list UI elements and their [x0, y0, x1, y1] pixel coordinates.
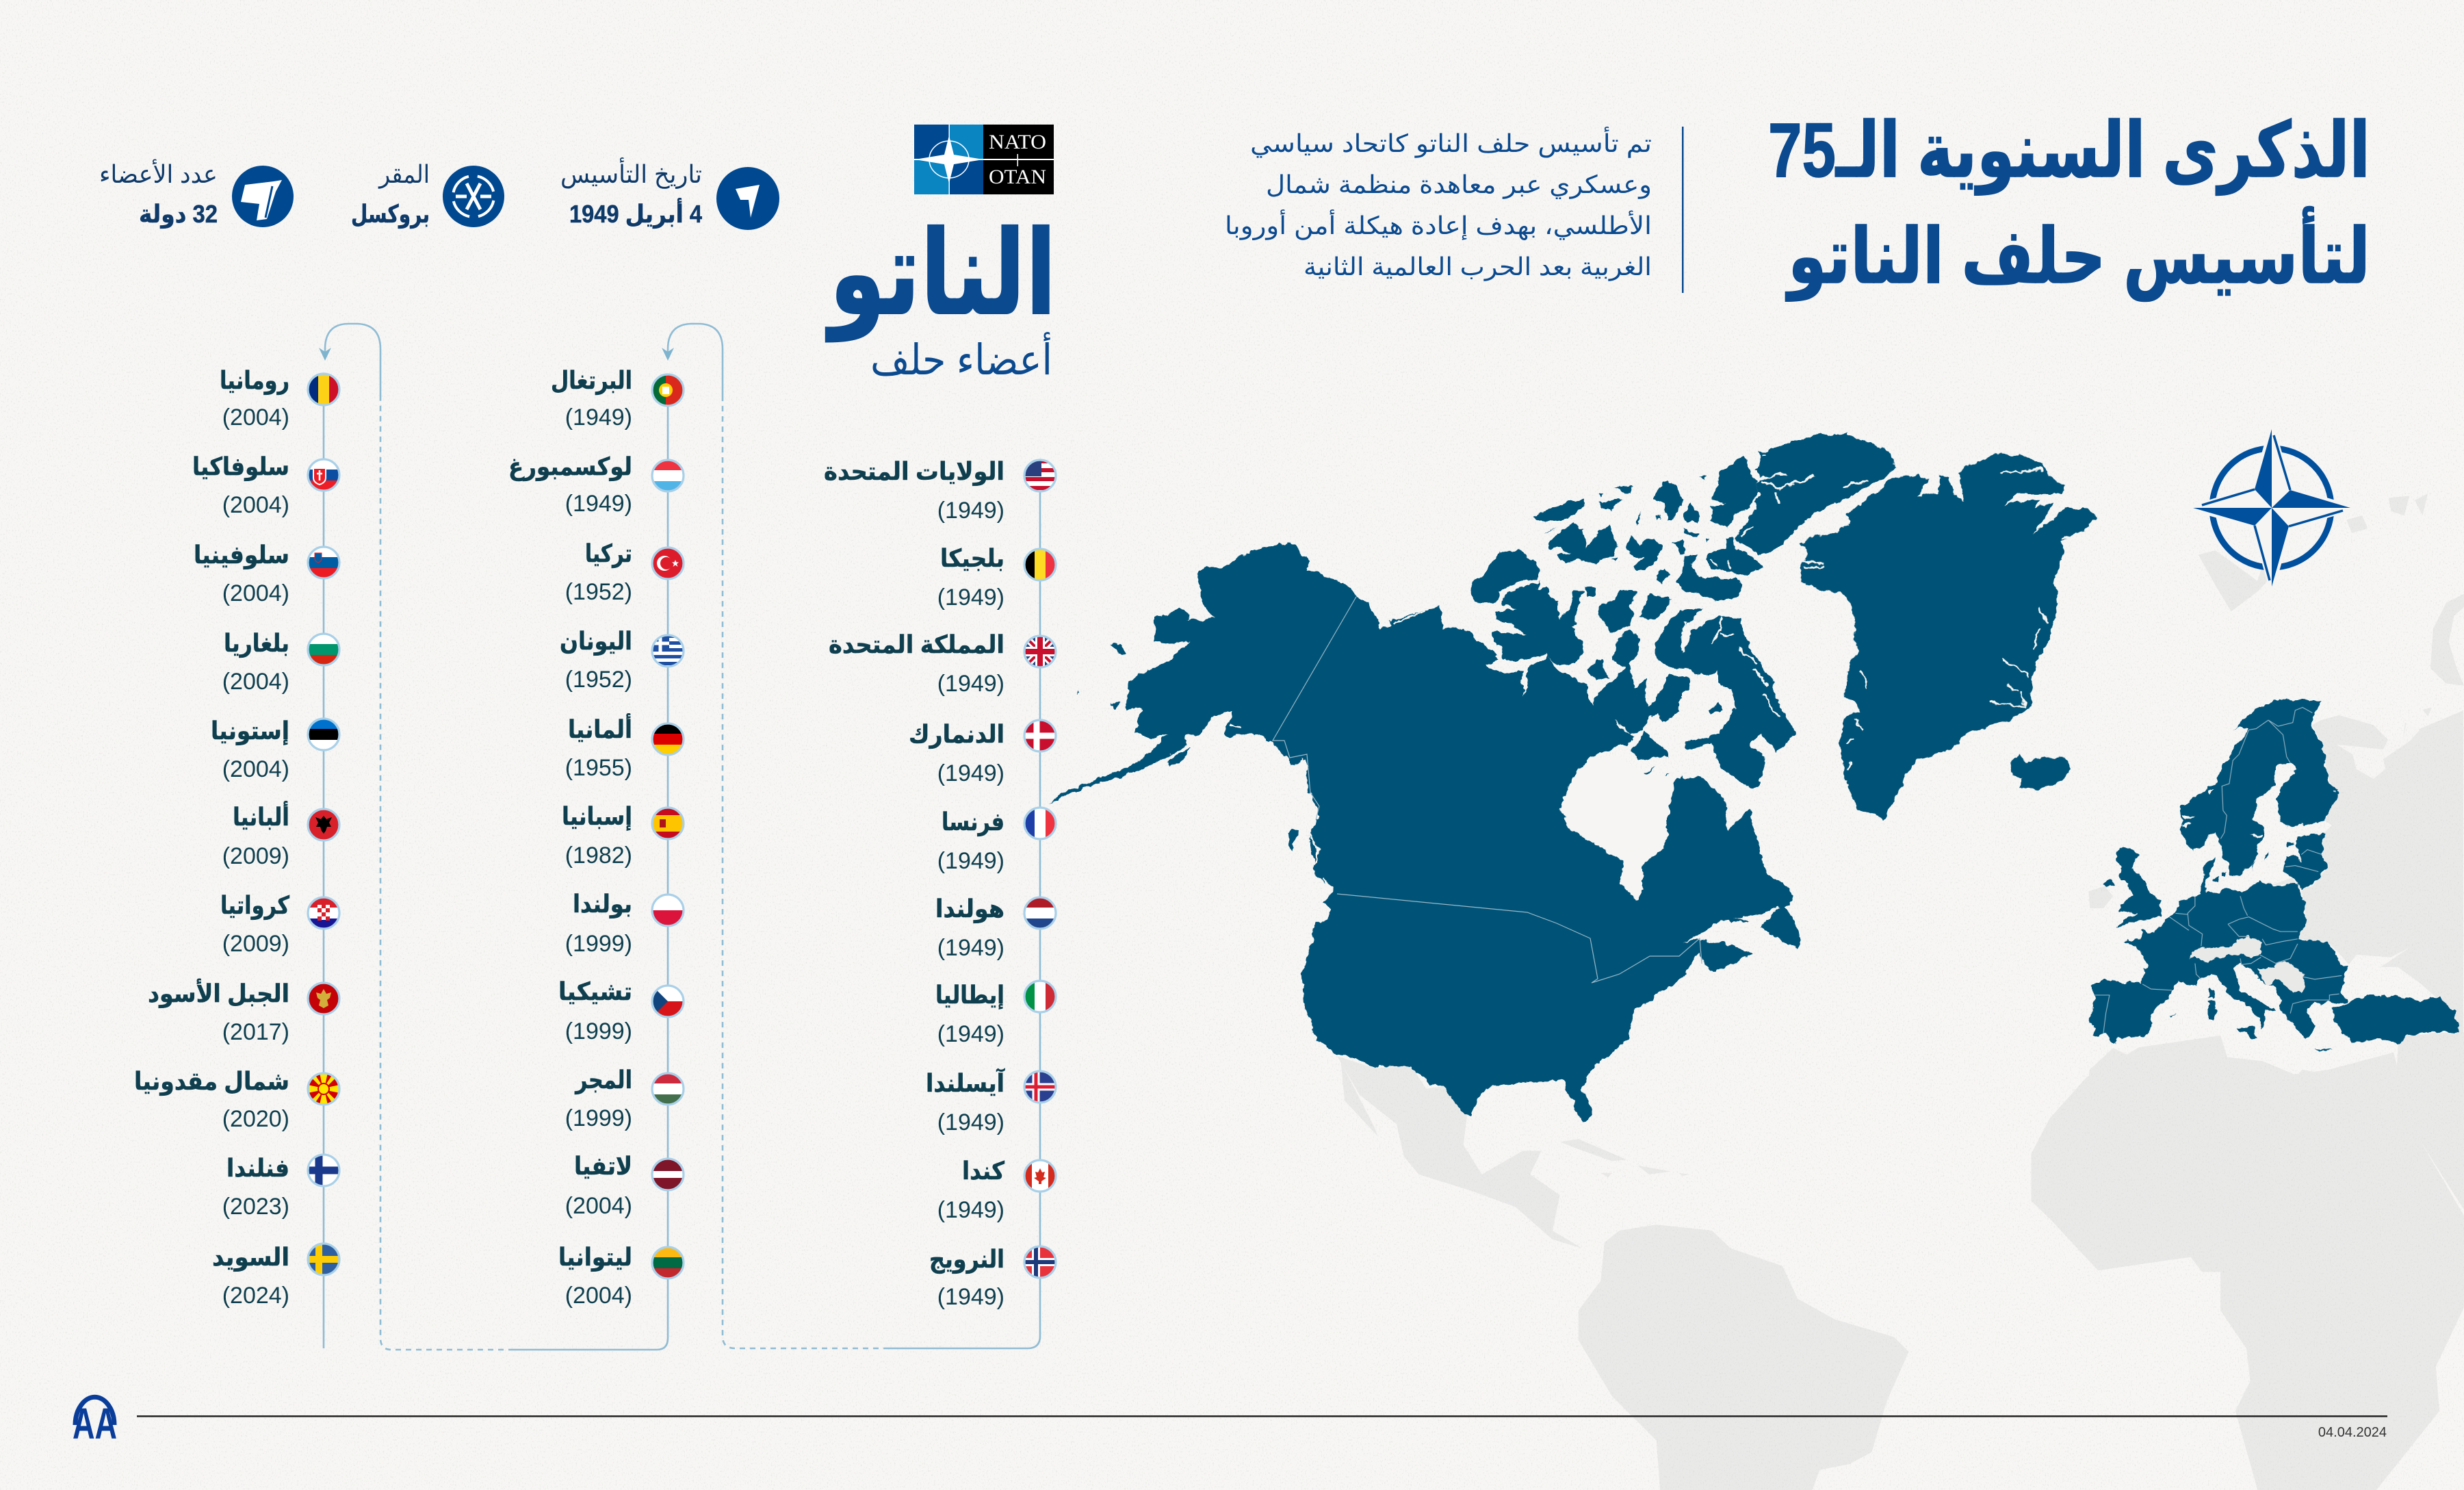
member: Greece: اليونان [560, 627, 632, 656]
member: Turkey: تركيا [585, 539, 632, 568]
member: Luxembourg [508, 452, 684, 517]
white sea on grey map [2337, 723, 2420, 779]
member: Greece [560, 627, 684, 693]
member: United States [824, 457, 1056, 524]
column 2 members [508, 366, 684, 1309]
member: Iceland [926, 1068, 1056, 1135]
member: Denmark [909, 719, 1056, 786]
member: Slovakia: (2004) [222, 492, 289, 518]
member: Norway: (1949) [937, 1284, 1004, 1310]
continental Europe, Italy and Iberia [2088, 856, 2349, 1043]
member: Greece: (1952) [565, 667, 632, 693]
fact: founding date: تاريخ التأسيس [560, 157, 702, 189]
member: United Kingdom: (1949) [937, 671, 1004, 697]
member: Montenegro [148, 978, 340, 1045]
member: Romania: (2004) [222, 404, 289, 431]
member: Bulgaria: بلغاريا [224, 629, 289, 658]
member: Portugal: (1949) [565, 404, 632, 431]
fact: number of members: عدد الأعضاء [99, 159, 218, 188]
member: Albania [222, 801, 340, 869]
member: Norway: النرويج [929, 1245, 1004, 1274]
member: Italy: (1949) [937, 1021, 1004, 1047]
footer rule [137, 1415, 2387, 1417]
member: Estonia: (2004) [222, 756, 289, 782]
member: France: فرنسا [942, 808, 1004, 836]
member: North Macedonia [134, 1067, 340, 1132]
Alaska and western North America [1047, 543, 1587, 1075]
intro text: وعسكري عبر معاهدة منظمة شمال [1266, 170, 1652, 199]
NATO OTAN logo: NATO [989, 131, 1046, 153]
member: Norway [929, 1245, 1056, 1310]
member: Belgium: (1949) [937, 585, 1004, 611]
Anadolu Agency logo: AA [73, 1399, 117, 1448]
fact: founding date: 4 أبريل 1949 [569, 198, 702, 229]
fact: number of members [99, 159, 294, 229]
member: Latvia [565, 1152, 684, 1219]
member: Belgium [937, 544, 1056, 611]
member: United States: الولايات المتحدة [824, 457, 1004, 486]
member: Turkey [565, 539, 684, 605]
member: Slovakia [192, 452, 340, 518]
intro text [1225, 127, 1652, 281]
member: Italy [935, 980, 1056, 1047]
member: North Macedonia: شمال مقدونيا [134, 1067, 289, 1096]
member: Montenegro: (2017) [222, 1019, 289, 1045]
member: Luxembourg: (1949) [565, 491, 632, 517]
member: United Kingdom [829, 630, 1056, 697]
member: Finland: (2023) [222, 1194, 289, 1220]
member: Poland: (1999) [565, 931, 632, 957]
NATO OTAN logo [914, 125, 1054, 194]
member: Canada [937, 1157, 1056, 1223]
member: Bulgaria [222, 629, 340, 695]
member: Slovakia: سلوفاكيا [192, 452, 289, 481]
member: United Kingdom: المملكة المتحدة [829, 630, 1004, 658]
member: Turkey: (1952) [565, 579, 632, 605]
member: Slovenia [194, 541, 340, 606]
intro text: تم تأسيس حلف الناتو كاتحاد سياسي [1250, 127, 1652, 158]
fact: founding date [560, 157, 779, 230]
Hudson Bay water [1561, 758, 1676, 899]
member: Iceland: آيسلندا [926, 1068, 1006, 1097]
member: Slovenia: (2004) [222, 580, 289, 606]
member: Canada: كندا [962, 1157, 1004, 1185]
member: Albania: ألبانيا [233, 801, 289, 831]
member: Lithuania: (2004) [565, 1283, 632, 1309]
member: Czechia [558, 977, 684, 1044]
member: France [937, 807, 1056, 874]
member: Germany: ألمانيا [568, 713, 632, 743]
member: Hungary [565, 1066, 684, 1131]
member: Albania: (2009) [222, 843, 289, 869]
member: Latvia: لاتفيا [574, 1152, 632, 1180]
member: Netherlands [935, 895, 1056, 961]
column 1 members [824, 457, 1056, 1310]
member: Italy: إيطاليا [935, 981, 1004, 1010]
member: Lithuania [558, 1243, 684, 1309]
member: Estonia [211, 717, 340, 782]
member: Hungary: المجر [574, 1066, 632, 1094]
NATO OTAN logo: OTAN [989, 166, 1046, 188]
fact: headquarters [351, 160, 504, 229]
member: Sweden: السويد [212, 1243, 289, 1272]
member: Hungary: (1999) [565, 1105, 632, 1131]
member: Luxembourg: لوكسمبورغ [508, 452, 632, 481]
eastern Canada and United States [1302, 728, 1802, 1122]
member: Czechia: تشيكيا [558, 977, 632, 1005]
member: Estonia: إستونيا [211, 717, 289, 745]
member: Germany [565, 713, 684, 781]
column 3 members [134, 366, 340, 1309]
heading: NATO: الناتو [826, 209, 1056, 342]
Great Britain and Northern Ireland [2116, 847, 2162, 928]
Canadian Arctic archipelago [1471, 433, 1847, 801]
map: North America, Greenland and Europe [1047, 433, 2458, 1122]
member: Netherlands: (1949) [937, 935, 1004, 961]
Mediterranean islands [2169, 988, 2332, 1052]
Scandinavia and Finland [2179, 698, 2338, 875]
Anadolu Agency logo [73, 1397, 117, 1448]
Greenland, Iceland and northern Ellesmere [1797, 433, 2098, 820]
Europe and Turkey NATO members [2088, 698, 2458, 1052]
member: Montenegro: الجبل الأسود [148, 978, 289, 1008]
fact: number of members: 32 دولة [139, 200, 218, 229]
member: Spain: إسبانيا [562, 802, 632, 831]
member: Denmark: الدنمارك [909, 720, 1004, 749]
member: Czechia: (1999) [565, 1018, 632, 1044]
member: Canada: (1949) [937, 1197, 1004, 1223]
background world map: grey landmasses [1337, 493, 2464, 1490]
member: Denmark: (1949) [937, 760, 1004, 786]
member: Finland [222, 1154, 340, 1220]
member: Portugal: البرتغال [551, 366, 632, 395]
member: Lithuania: ليتوانيا [558, 1243, 632, 1272]
member: Croatia [220, 891, 340, 957]
fact: headquarters: المقر [378, 160, 430, 189]
title [1768, 107, 2370, 301]
map: national borders [1273, 597, 2342, 1033]
Baltic states [2283, 834, 2327, 889]
member: Croatia: كرواتيا [220, 891, 289, 920]
member: France: (1949) [937, 848, 1004, 874]
member: Latvia: (2004) [565, 1193, 632, 1219]
member: Finland: فنلندا [226, 1154, 289, 1182]
member: Spain: (1982) [565, 843, 632, 869]
member: United States: (1949) [937, 498, 1004, 524]
member: Romania: رومانيا [220, 366, 289, 395]
subheading: alliance members: أعضاء حلف [870, 332, 1052, 384]
member: Portugal [551, 366, 684, 431]
member: Croatia: (2009) [222, 931, 289, 957]
member: Sweden: (2024) [222, 1283, 289, 1309]
icon: large NATO compass star [2193, 429, 2350, 587]
date: 04.04.2024 [2318, 1425, 2387, 1440]
member: Belgium: بلجيكا [940, 544, 1004, 572]
non-member countries in grey: Switzerland, Austria, Serbia, Bosnia [2189, 936, 2305, 992]
member: Germany: (1955) [565, 755, 632, 781]
member: Poland: بولندا [573, 890, 632, 919]
member: Iceland: (1949) [937, 1109, 1004, 1135]
member: Poland [565, 890, 684, 957]
fact: headquarters: بروكسل [351, 200, 430, 229]
Swedish lakes and Scandinavian fjords [2181, 790, 2261, 838]
member: Romania [220, 366, 340, 431]
Turkey [2332, 995, 2458, 1043]
intro text: الغربية بعد الحرب العالمية الثانية [1304, 253, 1652, 281]
member: Spain [562, 802, 684, 869]
member: Sweden [212, 1243, 340, 1309]
Danish islands [2212, 872, 2228, 883]
timeline connectors [319, 324, 1040, 1350]
divider between title and intro [1682, 127, 1683, 293]
member: Slovenia: سلوفينيا [194, 541, 289, 569]
member: North Macedonia: (2020) [222, 1106, 289, 1132]
member: Bulgaria: (2004) [222, 669, 289, 695]
member: Netherlands: هولندا [935, 895, 1004, 923]
intro text: الأطلسي، بهدف إعادة هيكلة أمن أوروبا [1225, 209, 1652, 240]
